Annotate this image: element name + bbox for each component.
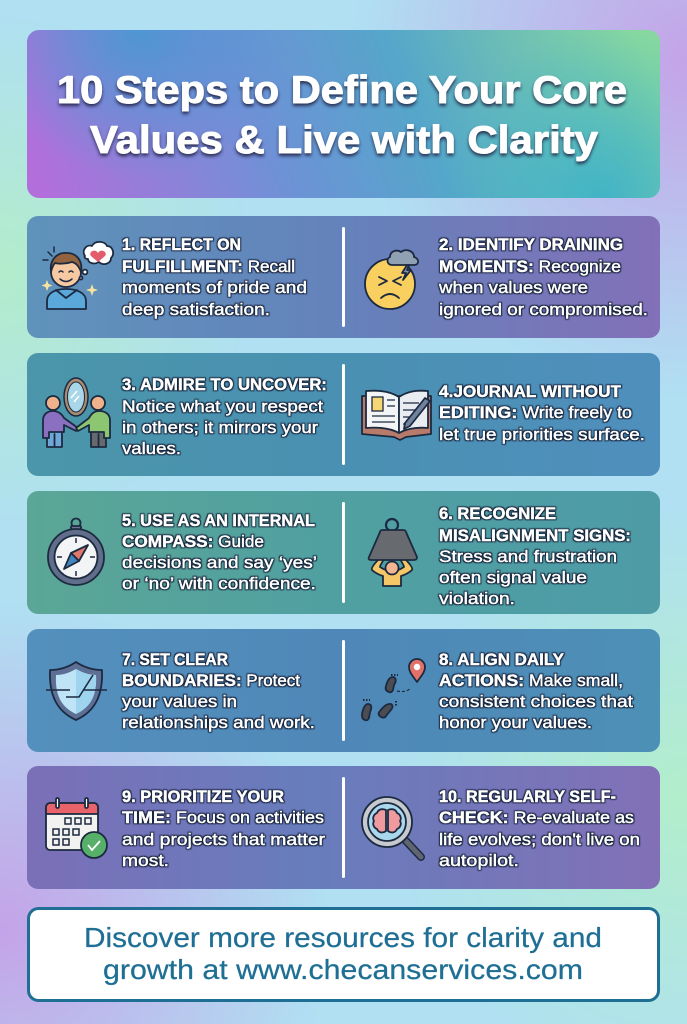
- icon: magnifier with brain: [362, 797, 421, 857]
- step 8 text: consistent choices that: [439, 693, 633, 711]
- step 8 text: ACTIONS: Make small,: [439, 672, 623, 690]
- step 1 text: 1. REFLECT ON: [122, 236, 241, 254]
- footer text: growth at www.checanservices.com: [103, 954, 583, 985]
- step 3 text: [122, 376, 327, 458]
- step 6 text: 6. RECOGNIZE: [439, 505, 556, 523]
- step 4 text: EDITING: Write freely to: [439, 404, 632, 422]
- step 3 text: 3. ADMIRE TO UNCOVER:: [122, 376, 327, 394]
- step 2 text: when values were: [438, 279, 588, 297]
- icon: calendar with check: [46, 798, 107, 858]
- step 8 text: [439, 651, 633, 732]
- icon: open journal and pencil: [362, 391, 431, 440]
- step 9 text: TIME: Focus on activities: [122, 809, 324, 827]
- title: Values & Live with Clarity: [90, 119, 599, 162]
- step 7 text: BOUNDARIES: Protect: [122, 672, 300, 690]
- step 5 text: [122, 512, 317, 593]
- step 7 text: your values in: [122, 693, 237, 711]
- panel: row 4: [27, 629, 660, 752]
- step 9 text: most.: [122, 852, 169, 870]
- step 2 text: [438, 236, 648, 319]
- step 1 text: moments of pride and: [122, 279, 307, 297]
- step 9 text: [122, 788, 326, 870]
- step 1 text: FULFILLMENT: Recall: [122, 258, 295, 276]
- step 4 text: 4.JOURNAL WITHOUT: [439, 383, 621, 401]
- step 6 text: often signal value: [439, 569, 587, 587]
- footer text: [84, 922, 602, 985]
- step 7 text: [122, 651, 315, 732]
- icon: compass: [48, 518, 104, 585]
- step 1 text: deep satisfaction.: [122, 301, 270, 319]
- footer text: Discover more resources for clarity and: [84, 922, 602, 953]
- step 8 text: honor your values.: [439, 714, 592, 732]
- icon: man with heart thought bubble: [42, 242, 113, 309]
- step 4 text: let true priorities surface.: [439, 426, 645, 444]
- step 3 text: values.: [122, 440, 181, 458]
- step 6 text: violation.: [439, 590, 515, 608]
- icon: two people and mirror: [43, 378, 110, 447]
- icon: angry face with storm cloud: [365, 250, 418, 309]
- step 5 text: COMPASS: Guide: [122, 533, 264, 551]
- step 9 text: 9. PRIORITIZE YOUR: [122, 788, 284, 806]
- step 2 text: MOMENTS: Recognize: [439, 258, 621, 276]
- icon: footprints to map pin: [362, 659, 425, 720]
- step 6 text: Stress and frustration: [439, 548, 617, 566]
- step 10 text: life evolves; don't live on: [439, 831, 640, 849]
- step 5 text: 5. USE AS AN INTERNAL: [122, 512, 315, 530]
- panel: title header: [27, 30, 660, 198]
- step 10 text: 10. REGULARLY SELF-: [439, 788, 616, 806]
- step 9 text: and projects that matter: [122, 831, 326, 849]
- panel: row 2: [27, 353, 660, 476]
- icon: person lifting heavy weight: [369, 519, 417, 586]
- step 10 text: [439, 788, 640, 870]
- step 3 text: Notice what you respect: [122, 398, 323, 416]
- step 7 text: relationships and work.: [122, 714, 315, 732]
- step 2 text: 2. IDENTIFY DRAINING: [439, 236, 623, 254]
- step 6 text: [439, 505, 631, 608]
- panel: row 3: [27, 491, 660, 614]
- step 10 text: CHECK: Re-evaluate as: [439, 809, 634, 827]
- title: [57, 69, 627, 162]
- step 4 text: [439, 383, 645, 444]
- panel: footer call to action: [28, 908, 658, 1000]
- panel: row 1: [27, 216, 660, 338]
- icon: shield with check: [46, 662, 107, 720]
- step 1 text: [122, 236, 307, 319]
- panel: row 5: [27, 766, 660, 889]
- step 3 text: in others; it mirrors your: [122, 419, 319, 437]
- title: 10 Steps to Define Your Core: [57, 69, 627, 112]
- step 8 text: 8. ALIGN DAILY: [439, 651, 564, 669]
- step 5 text: or ‘no’ with confidence.: [122, 575, 316, 593]
- step 7 text: 7. SET CLEAR: [122, 651, 228, 669]
- step 5 text: decisions and say ‘yes’: [122, 554, 317, 572]
- step 10 text: autopilot.: [439, 852, 519, 870]
- step 6 text: MISALIGNMENT SIGNS:: [439, 527, 631, 545]
- step 2 text: ignored or compromised.: [439, 301, 648, 319]
